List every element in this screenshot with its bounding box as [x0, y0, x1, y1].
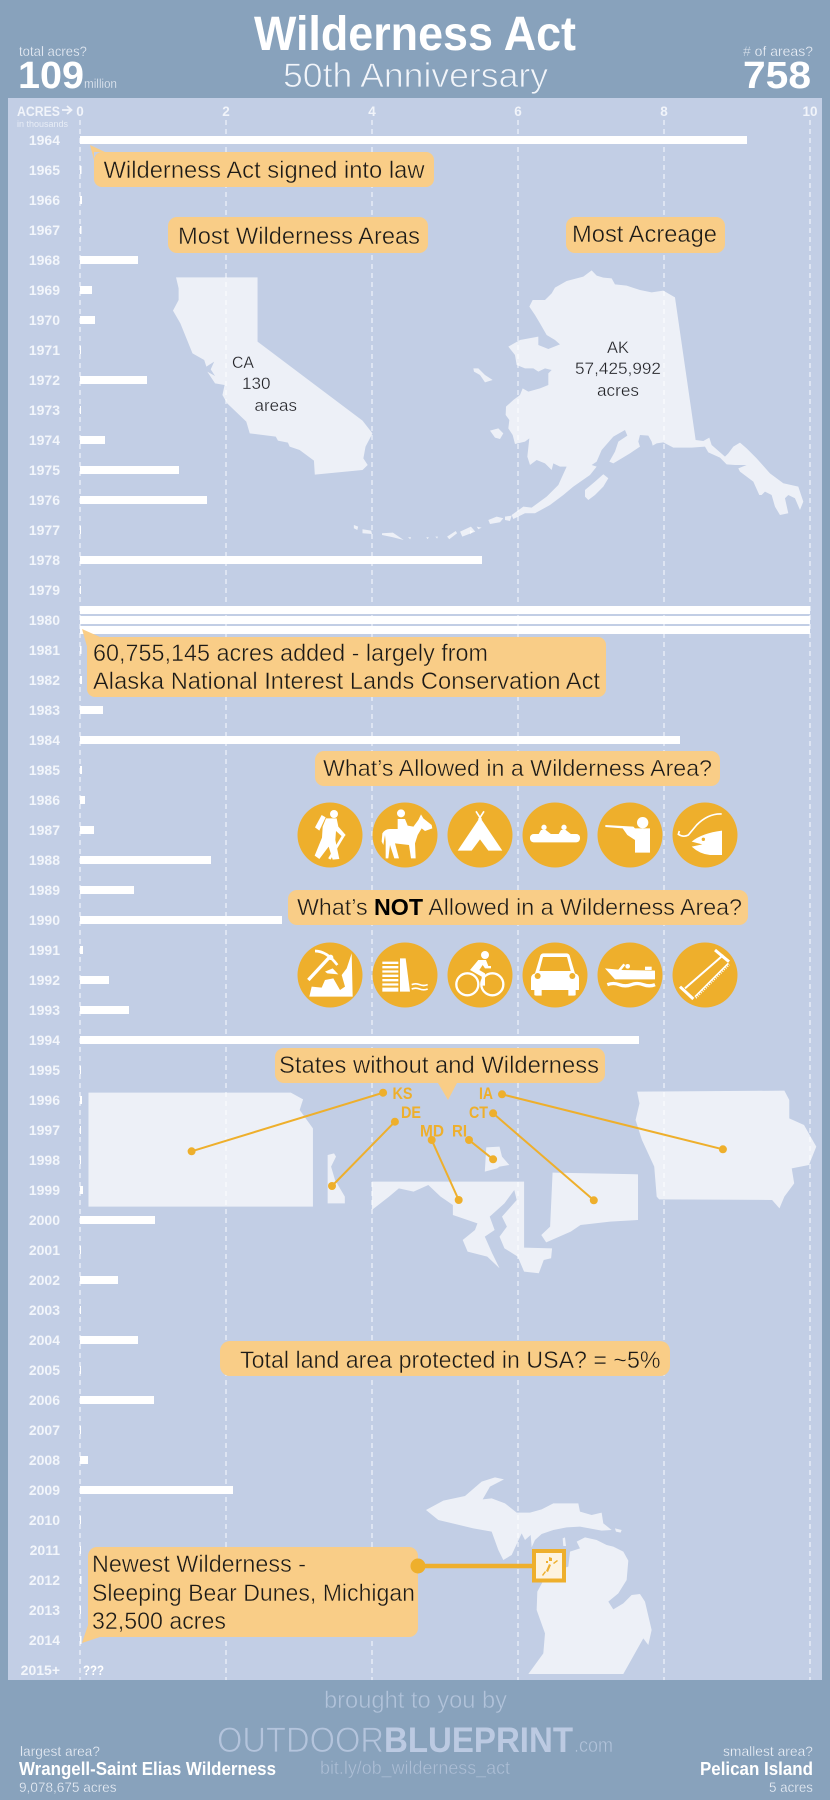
callout: what's not allowed heading: What’s NOT Allowed in a Wilderness Area? — [297, 894, 742, 920]
callout: states without wilderness — [275, 1048, 605, 1100]
callout: wilderness act signed: Wilderness Act signed into law — [104, 157, 425, 184]
leader: DE — [328, 1104, 421, 1190]
stat: largest area — [19, 1743, 276, 1795]
year labels: 1968 — [29, 252, 60, 268]
year labels: 1975 — [29, 462, 60, 478]
icon: hunting — [598, 802, 662, 868]
year labels: 1995 — [29, 1062, 60, 1078]
year labels: 1966 — [29, 192, 60, 208]
year labels: 2002 — [29, 1272, 60, 1288]
header — [18, 8, 813, 97]
year labels: 1971 — [29, 342, 60, 358]
axis: acres in thousands: 10 — [802, 104, 818, 119]
callout: 1980 acres added — [82, 629, 606, 697]
map: Rhode Island — [485, 1147, 509, 1172]
callout: total land protected: Total land area protected in USA? = ~5% — [240, 1347, 660, 1374]
map: Iowa — [636, 1091, 816, 1208]
year labels: 1980 — [29, 612, 60, 628]
callout: states without wilderness: States without and Wilderness — [279, 1052, 599, 1079]
unknown future value: ??? — [83, 1662, 104, 1678]
icon: dam — [372, 942, 438, 1008]
callout: newest wilderness — [80, 1547, 418, 1644]
stat: largest area: 9,078,675 acres — [19, 1779, 116, 1795]
leader: MD — [420, 1122, 463, 1204]
icon: fishing — [672, 802, 738, 868]
year labels: 2014 — [29, 1632, 60, 1648]
axis: acres in thousands: ACRES — [17, 104, 60, 119]
icon: motorboat — [598, 942, 662, 1008]
stat: largest area: Wrangell-Saint Elias Wilderness — [19, 1759, 276, 1779]
map: California: areas — [254, 396, 297, 415]
axis: acres in thousands: 2 — [222, 104, 230, 119]
year labels: 2003 — [29, 1302, 60, 1318]
leader: IA: IA — [479, 1085, 493, 1103]
axis: acres in thousands: 8 — [660, 104, 668, 119]
year labels: 1998 — [29, 1152, 60, 1168]
logo: outdoor blueprint: .com — [574, 1735, 613, 1757]
map: Kansas — [88, 1093, 313, 1207]
callout: newest wilderness: Sleeping Bear Dunes, Michigan — [92, 1580, 415, 1607]
callout: most acreage: Most Acreage — [572, 221, 717, 248]
year labels: 1981 — [29, 642, 60, 658]
leader: KS — [188, 1085, 412, 1155]
map: Delaware — [328, 1153, 345, 1203]
logo: outdoor blueprint: OUTDOOR — [217, 1721, 384, 1760]
year labels: 2001 — [29, 1242, 60, 1258]
state labels and leader lines — [188, 1085, 727, 1204]
callout: newest wilderness: 32,500 acres — [92, 1608, 226, 1635]
year labels: 2007 — [29, 1422, 60, 1438]
year labels: 1974 — [29, 432, 60, 448]
leader: MD: MD — [420, 1122, 444, 1140]
bar chart: acres added per year — [80, 136, 810, 1614]
year labels: 1999 — [29, 1182, 60, 1198]
year labels — [21, 132, 60, 1678]
icon: teepee camping — [448, 802, 512, 868]
year labels: 1992 — [29, 972, 60, 988]
year labels: 1976 — [29, 492, 60, 508]
year labels: 2009 — [29, 1482, 60, 1498]
year labels: 1989 — [29, 882, 60, 898]
axis: acres in thousands: 6 — [514, 104, 522, 119]
map: Michigan — [426, 1477, 652, 1674]
callout: most acreage — [566, 217, 725, 253]
stat: total acres: million — [84, 76, 117, 91]
maps: states without any wilderness — [88, 1091, 816, 1273]
year labels: 1965 — [29, 162, 60, 178]
year labels: 1984 — [29, 732, 60, 748]
stat: smallest area: 5 acres — [769, 1779, 813, 1795]
icon: mining — [298, 942, 362, 1008]
year labels: 1979 — [29, 582, 60, 598]
year labels: 1986 — [29, 792, 60, 808]
year labels: 2012 — [29, 1572, 60, 1588]
map: Maryland — [372, 1182, 552, 1273]
stat: total acres: 109 — [18, 55, 84, 97]
locator: Sleeping Bear Dunes — [410, 1551, 564, 1580]
year labels: 1985 — [29, 762, 60, 778]
year labels: 2006 — [29, 1392, 60, 1408]
year labels: 1972 — [29, 372, 60, 388]
year labels: 2004 — [29, 1332, 60, 1348]
year labels: 1964 — [29, 132, 60, 148]
leader: KS: KS — [392, 1085, 412, 1103]
icon: saw — [672, 942, 738, 1008]
credit: brought to you by: brought to you by — [324, 1687, 507, 1714]
year labels: 2005 — [29, 1362, 60, 1378]
year labels: 1987 — [29, 822, 60, 838]
axis: acres in thousands: in thousands — [17, 119, 68, 129]
icon: hiking — [298, 802, 362, 868]
short link: bit.ly/ob_wilderness_act — [320, 1758, 510, 1779]
year labels: 1991 — [29, 942, 60, 958]
arrow: axis direction — [62, 106, 72, 114]
map: California: CA — [232, 353, 255, 372]
stat: total acres — [18, 43, 117, 97]
year labels: 1988 — [29, 852, 60, 868]
callout: 1980 acres added: Alaska National Interest Lands Conservation Act — [93, 668, 600, 695]
logo: outdoor blueprint — [217, 1721, 613, 1760]
logo: outdoor blueprint: BLUEPRINT — [384, 1721, 573, 1760]
year labels: 1997 — [29, 1122, 60, 1138]
stat: smallest area: smallest area? — [723, 1743, 813, 1759]
year labels: 2013 — [29, 1602, 60, 1618]
year labels: 2000 — [29, 1212, 60, 1228]
year labels: 1996 — [29, 1092, 60, 1108]
year labels: 1967 — [29, 222, 60, 238]
year labels: 1970 — [29, 312, 60, 328]
year labels: 1993 — [29, 1002, 60, 1018]
leader: CT — [469, 1104, 598, 1204]
year labels: 1977 — [29, 522, 60, 538]
stat: number of areas: 758 — [743, 55, 811, 97]
year labels: 1973 — [29, 402, 60, 418]
leader: RI — [452, 1122, 497, 1163]
map: Alaska: acres — [597, 381, 639, 400]
axis: acres in thousands: 4 — [368, 104, 376, 119]
stat: total acres: total acres? — [19, 43, 87, 59]
callout: what's allowed heading: What’s Allowed in a Wilderness Area? — [323, 755, 712, 781]
axis: acres in thousands: 0 — [76, 104, 84, 119]
map: Alaska: 57,425,992 — [575, 359, 661, 378]
axis: acres in thousands — [17, 104, 818, 129]
callout: newest wilderness: Newest Wilderness - — [92, 1551, 306, 1578]
callout: 1980 acres added: 60,755,145 acres added - largely from — [93, 640, 488, 667]
leader: DE: DE — [401, 1104, 421, 1122]
title: Wilderness Act — [254, 8, 576, 61]
icon: bicycle — [448, 942, 512, 1008]
subtitle: 50th Anniversary — [283, 57, 548, 95]
year labels: 2011 — [30, 1542, 60, 1558]
leader: RI: RI — [452, 1122, 467, 1140]
icon: car — [522, 942, 588, 1008]
icon: horseback riding — [372, 802, 438, 868]
year labels: 1990 — [29, 912, 60, 928]
stat: smallest area — [700, 1743, 813, 1795]
map: California — [173, 277, 372, 475]
year labels: 1982 — [29, 672, 60, 688]
map: California: 130 — [242, 374, 270, 393]
stat: largest area: largest area? — [20, 1743, 100, 1759]
footer — [19, 1687, 813, 1795]
year labels: 2015+ — [21, 1662, 60, 1678]
year labels: 2010 — [29, 1512, 60, 1528]
map: Connecticut — [541, 1173, 638, 1242]
icon: rafting — [522, 802, 588, 868]
leader: CT: CT — [469, 1104, 488, 1122]
callout: wilderness act signed — [90, 145, 434, 187]
map: Alaska — [354, 270, 803, 540]
year labels: 1969 — [29, 282, 60, 298]
stat: number of areas: # of areas? — [743, 43, 813, 59]
stat: smallest area: Pelican Island — [700, 1759, 813, 1779]
map: Alaska: AK — [607, 338, 630, 357]
leader: IA — [479, 1085, 727, 1153]
year labels: 1978 — [29, 552, 60, 568]
year labels: 2008 — [29, 1452, 60, 1468]
year labels: 1994 — [29, 1032, 60, 1048]
year labels: 1983 — [29, 702, 60, 718]
callout: most wilderness areas: Most Wilderness Areas — [178, 223, 420, 250]
